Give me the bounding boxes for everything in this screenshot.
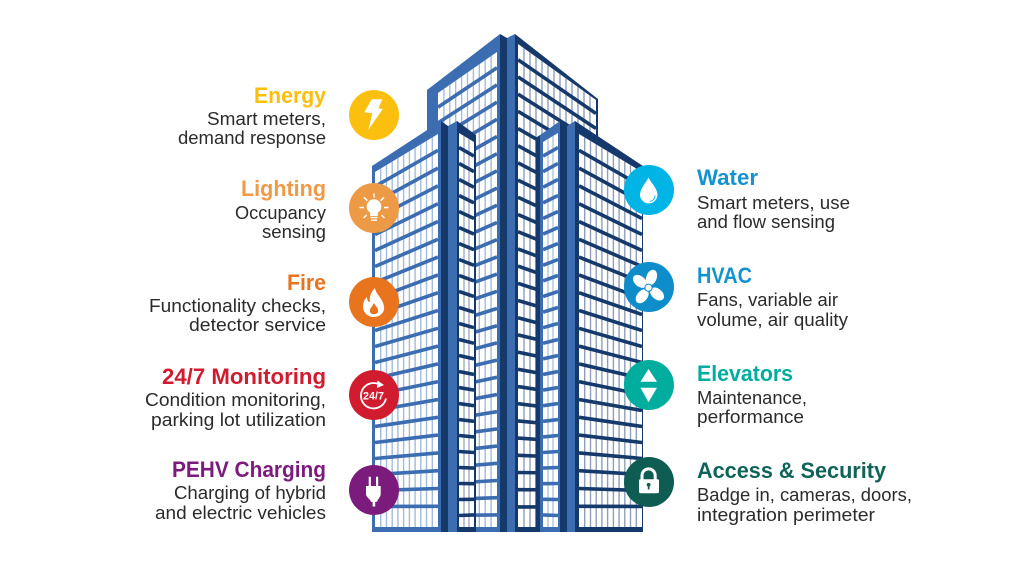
panel: lighting (235, 176, 399, 242)
panel: 24/7 monitoring (145, 364, 399, 430)
text: lighting description (235, 202, 327, 242)
text: elevators description: Maintenance, (697, 387, 807, 408)
icon: padlock (624, 457, 674, 507)
text: charging description: Charging of hybrid (174, 482, 326, 503)
panel: PEHV charging (155, 457, 399, 523)
text: fire description: detector service (189, 314, 326, 335)
heading: HVAC: HVAC (697, 263, 752, 288)
building illustration (372, 34, 643, 532)
panel: fire (149, 270, 399, 335)
heading: Lighting: Lighting (241, 176, 326, 201)
text: monitoring description (145, 389, 326, 430)
text: energy description (178, 108, 326, 148)
panel: elevators (624, 360, 807, 427)
text: charging description: and electric vehicles (155, 502, 326, 523)
right wing (540, 121, 643, 532)
text: access description: integration perimeter (697, 504, 875, 525)
text: energy description: demand response (178, 127, 326, 148)
text: elevators description (697, 387, 807, 427)
text: water description: and flow sensing (697, 211, 835, 232)
left wing (372, 121, 476, 532)
text: access description (697, 484, 912, 525)
heading: Fire: Fire (287, 270, 326, 295)
panel: energy (178, 83, 399, 148)
heading: PEHV Charging: PEHV Charging (172, 457, 326, 482)
icon: lightning bolt (349, 90, 399, 140)
icon: flame (349, 277, 399, 327)
text: water description: Smart meters, use (697, 192, 850, 213)
text: water description (697, 192, 850, 232)
text: monitoring description: Condition monitoring, (145, 389, 326, 410)
text: access description: Badge in, cameras, doors, (697, 484, 912, 505)
text: fire description (149, 295, 326, 335)
text: lighting description: Occupancy (235, 202, 327, 223)
text: lighting description: sensing (262, 221, 326, 242)
panel: water (624, 165, 850, 232)
panel: access and security (624, 457, 912, 525)
central tower (427, 34, 598, 532)
text: HVAC description (697, 289, 849, 330)
icon: electric plug (349, 465, 399, 515)
text: elevators description: performance (697, 406, 804, 427)
heading: Elevators: Elevators (697, 361, 793, 386)
heading: Access & Security: Access & Security (697, 458, 887, 483)
text: monitoring description: parking lot utilization (151, 409, 326, 430)
icon: 24/7 clock arrow (349, 370, 399, 420)
heading: 24/7 Monitoring: 24/7 Monitoring (162, 364, 326, 389)
heading: Water: Water (697, 165, 758, 190)
text: HVAC description: Fans, variable air (697, 289, 838, 310)
text: fire description: Functionality checks, (149, 295, 326, 316)
icon: water drop (624, 165, 674, 215)
text: charging description (155, 482, 326, 523)
icon: up and down arrows (624, 360, 674, 410)
panel: HVAC (624, 262, 849, 330)
icon: 24/7 clock arrow: 24/7 (363, 390, 384, 402)
icon: light bulb (349, 183, 399, 233)
text: energy description: Smart meters, (207, 108, 326, 129)
icon: fan (624, 262, 674, 312)
text: HVAC description: volume, air quality (697, 309, 849, 330)
heading: Energy: Energy (254, 83, 327, 108)
